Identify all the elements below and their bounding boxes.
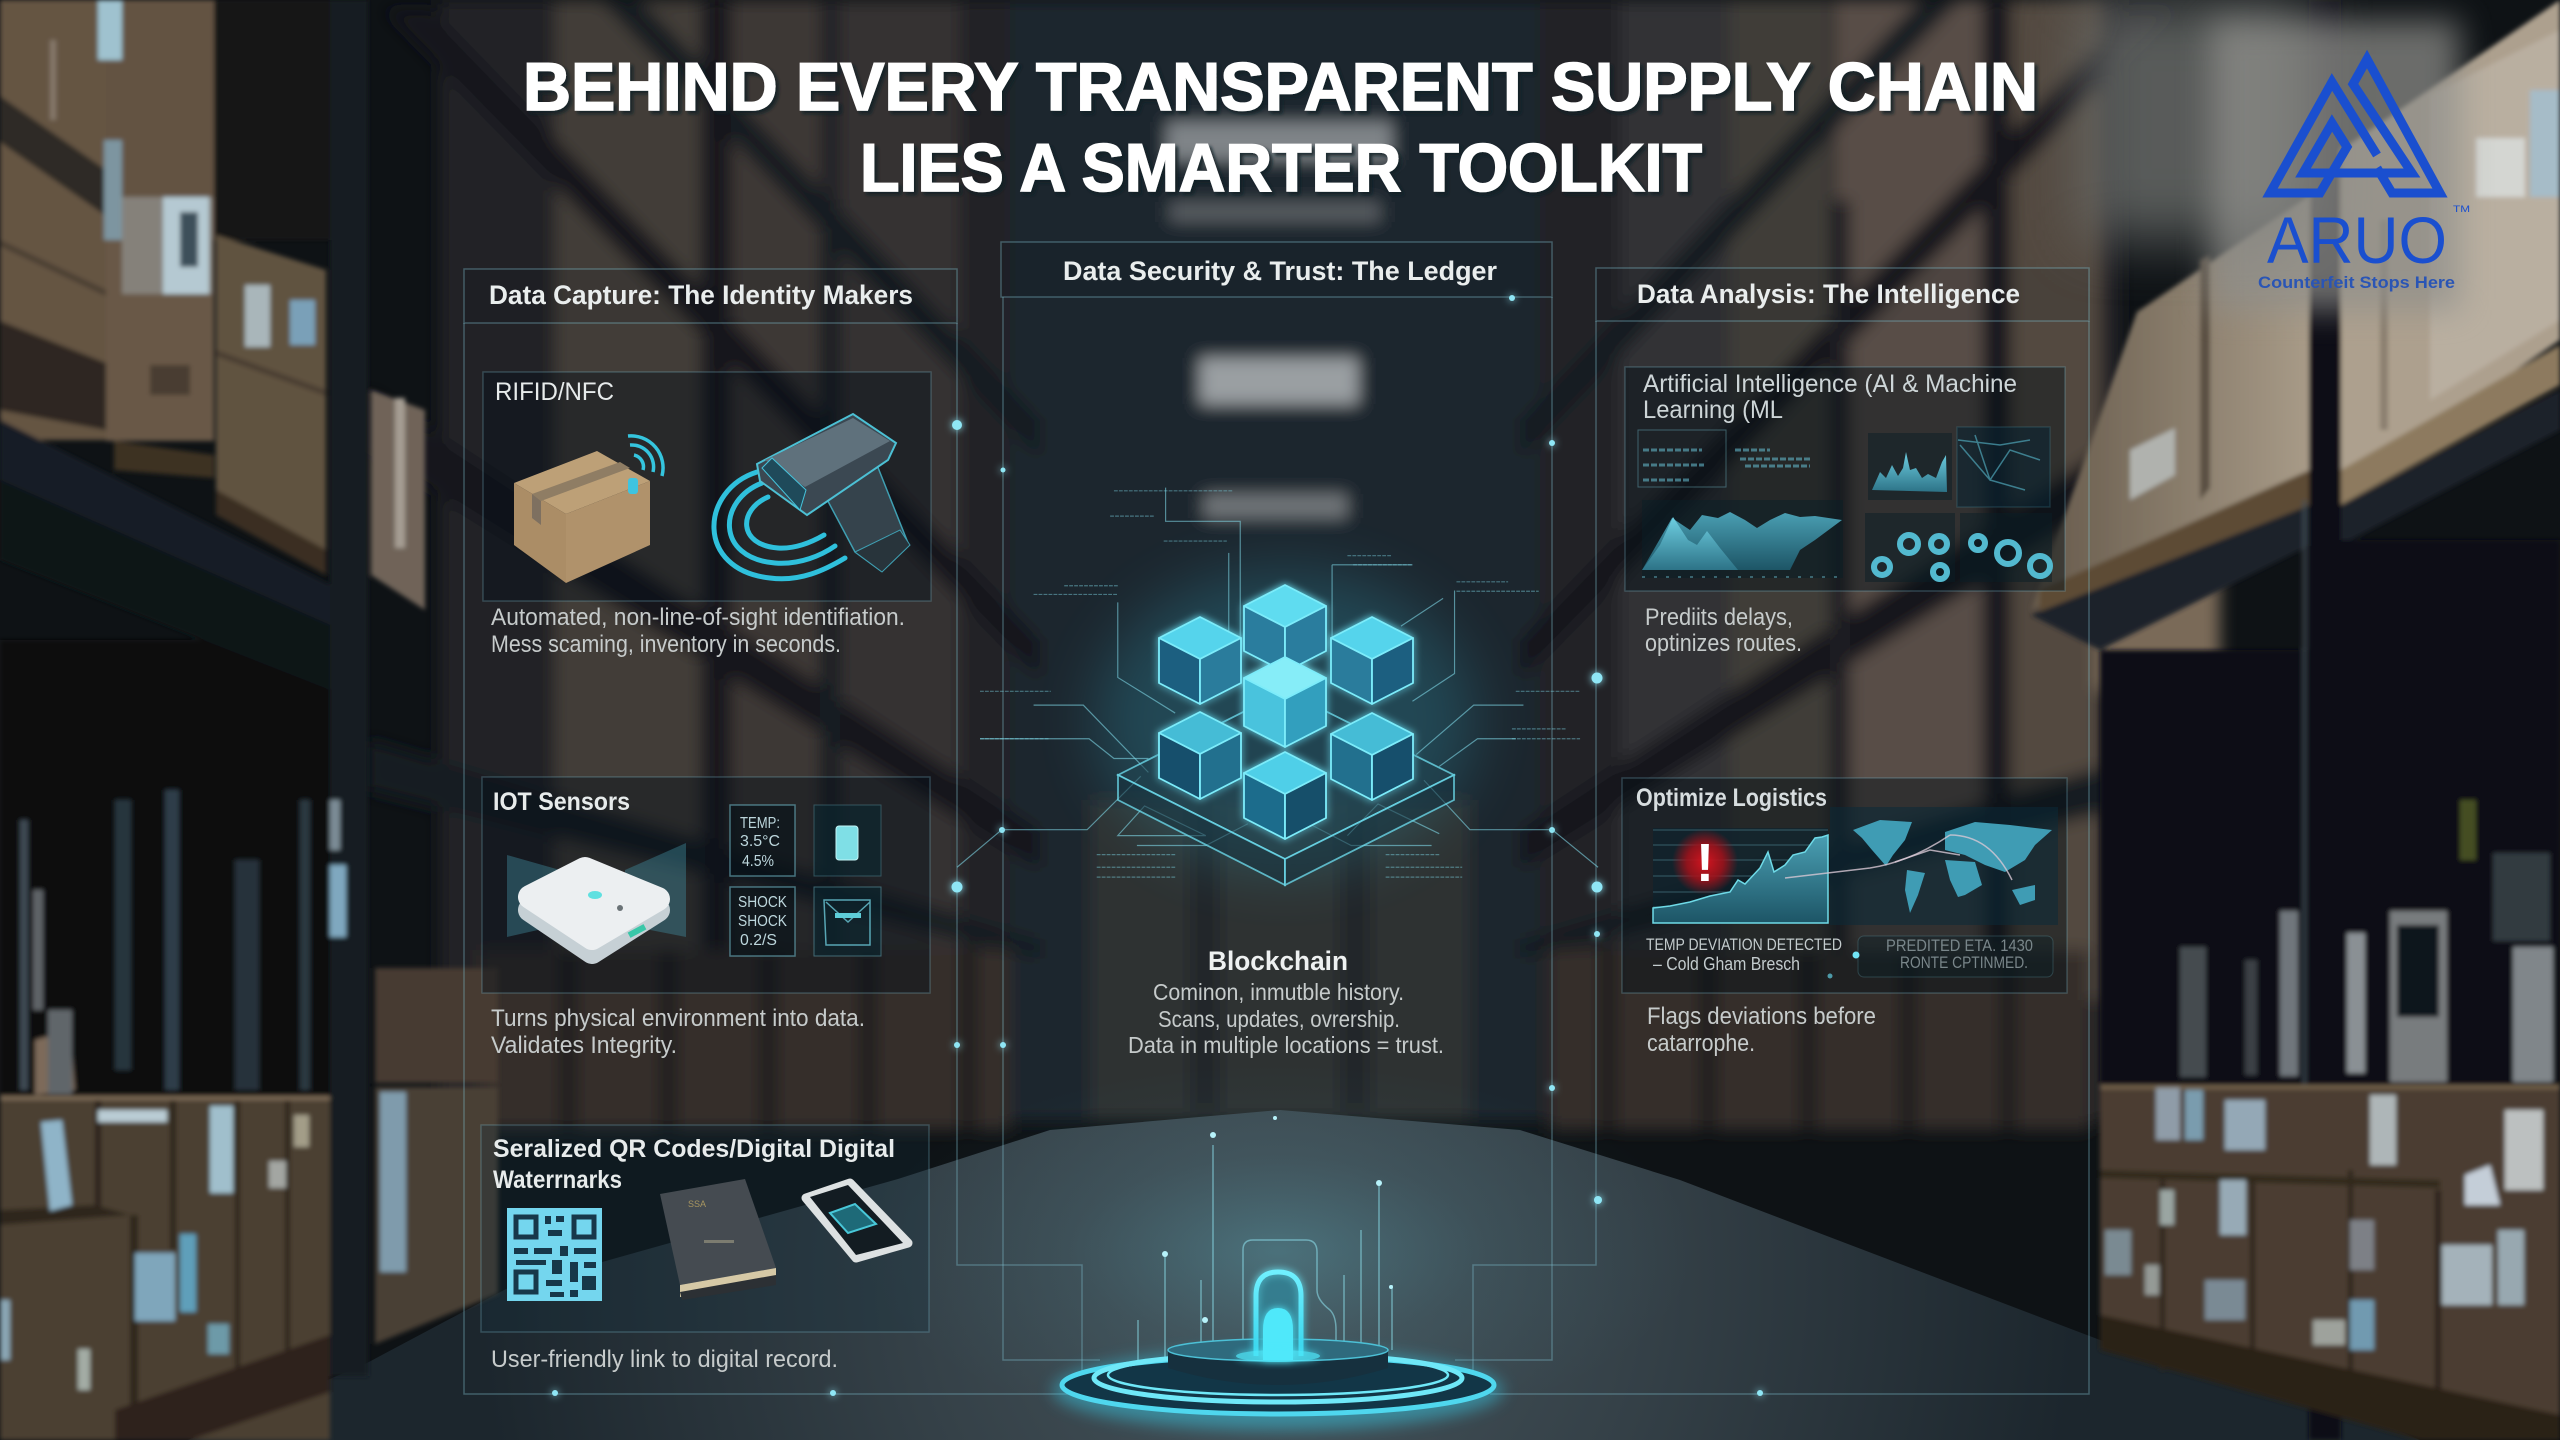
text: blockchain: Cominon, inmutble history. [1153, 979, 1404, 1005]
blockchain illustration [957, 488, 1598, 885]
sensor readouts: TEMP: [740, 815, 780, 832]
alert and ETA captions: – Cold Gham Bresch [1653, 954, 1800, 974]
sensor readouts: 0.2/S [740, 932, 777, 949]
icon: handheld scanner [714, 414, 910, 579]
icon: cardboard box with tag [514, 436, 663, 583]
text: RFID description [491, 604, 905, 658]
sensor readouts: 3.5°C [740, 833, 780, 850]
world map with routes [1785, 807, 2058, 925]
title [523, 49, 2038, 206]
card: IOT sensors: IOT Sensors [493, 788, 630, 816]
sensor readouts [730, 805, 881, 956]
text: blockchain: Data in multiple locations = trust. [1128, 1032, 1444, 1058]
heading: data security: Data Security & Trust: The Ledger [1063, 256, 1497, 286]
card: IOT sensors [482, 777, 930, 993]
temperature chart with alert [1653, 828, 1828, 923]
text: QR description: User-friendly link to digital record. [491, 1346, 838, 1373]
network map [1957, 427, 2050, 507]
icon: QR code [507, 1208, 602, 1301]
icon: ledger book: SSA [688, 1199, 706, 1209]
title: BEHIND EVERY TRANSPARENT SUPPLY CHAIN [523, 49, 2038, 125]
temperature chart with alert: ! [1696, 833, 1714, 893]
icon: sensor device [507, 843, 686, 952]
card: artificial intelligence: Artificial Intelligence (AI & Machine [1643, 370, 2017, 398]
icon: ledger book [660, 1179, 776, 1300]
panel: data analysis (right column frame) [1473, 268, 2089, 1394]
alert and ETA captions: TEMP DEVIATION DETECTED [1646, 935, 1842, 954]
text: logistics description: Flags deviations before [1647, 1003, 1876, 1030]
text: AI description: Prediits delays, [1645, 604, 1793, 631]
card: artificial intelligence [1625, 367, 2065, 591]
heading: data capture: Data Capture: The Identity Makers [489, 280, 913, 310]
logo: ARUO [2258, 59, 2470, 292]
sensor readouts: SHOCK [738, 894, 787, 911]
platform base [1118, 691, 1454, 885]
text: blockchain [1128, 946, 1444, 1058]
card: RFID/NFC [483, 372, 931, 601]
text: IOT description: Turns physical environment into data. [491, 1005, 865, 1032]
card: serialized QR codes: Seralized QR Codes/Digital Digital [493, 1135, 895, 1163]
text: blockchain: Scans, updates, ovrership. [1158, 1006, 1400, 1032]
card: optimize logistics: Optimize Logistics [1636, 784, 1827, 812]
text: logistics description: catarrophe. [1647, 1030, 1755, 1057]
text: IOT description [491, 1005, 865, 1059]
donut gauges [1865, 513, 2052, 582]
bar chart [1868, 433, 1952, 500]
logo: ARUO: Counterfeit Stops Here [2258, 273, 2455, 292]
alert and ETA captions: PREDITED ETA. 1430 [1886, 936, 2033, 955]
text: IOT description: Validates Integrity. [491, 1032, 677, 1059]
text: RFID description: Mess scaming, inventory in seconds. [491, 631, 841, 658]
text: RFID description: Automated, non-line-of-sight identifiation. [491, 604, 905, 631]
icon: glowing lock pedestal [1053, 1116, 1503, 1430]
small data box [1638, 430, 1812, 487]
panel: data security (centre column frame) [1001, 242, 1552, 1360]
panel: data capture (left column frame) [464, 269, 1082, 1394]
connector nodes [552, 295, 1763, 1396]
card: serialized QR codes: Waterrnarks [493, 1166, 622, 1194]
alert and ETA captions: RONTE CPTINMED. [1900, 953, 2028, 972]
logo: ARUO: ARUO [2267, 203, 2447, 277]
text: AI description: optinizes routes. [1645, 630, 1802, 657]
sensor readouts: 4.5% [742, 853, 774, 870]
text: blockchain: Blockchain [1208, 946, 1348, 976]
cube blocks [1159, 585, 1413, 839]
card: optimize logistics [1622, 778, 2067, 993]
text: logistics description [1647, 1003, 1876, 1057]
area chart [1642, 500, 1843, 578]
circuit lines [957, 488, 1598, 877]
sensor readouts: SHOCK [738, 913, 787, 930]
heading: data analysis: Data Analysis: The Intelligence [1637, 279, 2020, 309]
icon: smartphone [806, 1183, 908, 1258]
card: artificial intelligence: Learning (ML [1643, 396, 1783, 424]
alert and ETA captions [1646, 935, 2053, 978]
card: serialized QR codes [481, 1125, 929, 1332]
logo: ARUO: TM [2453, 204, 2470, 214]
title: LIES A SMARTER TOOLKIT [860, 130, 1702, 206]
card: RFID/NFC: RIFID/NFC [495, 378, 614, 406]
text: AI description [1645, 604, 1802, 657]
